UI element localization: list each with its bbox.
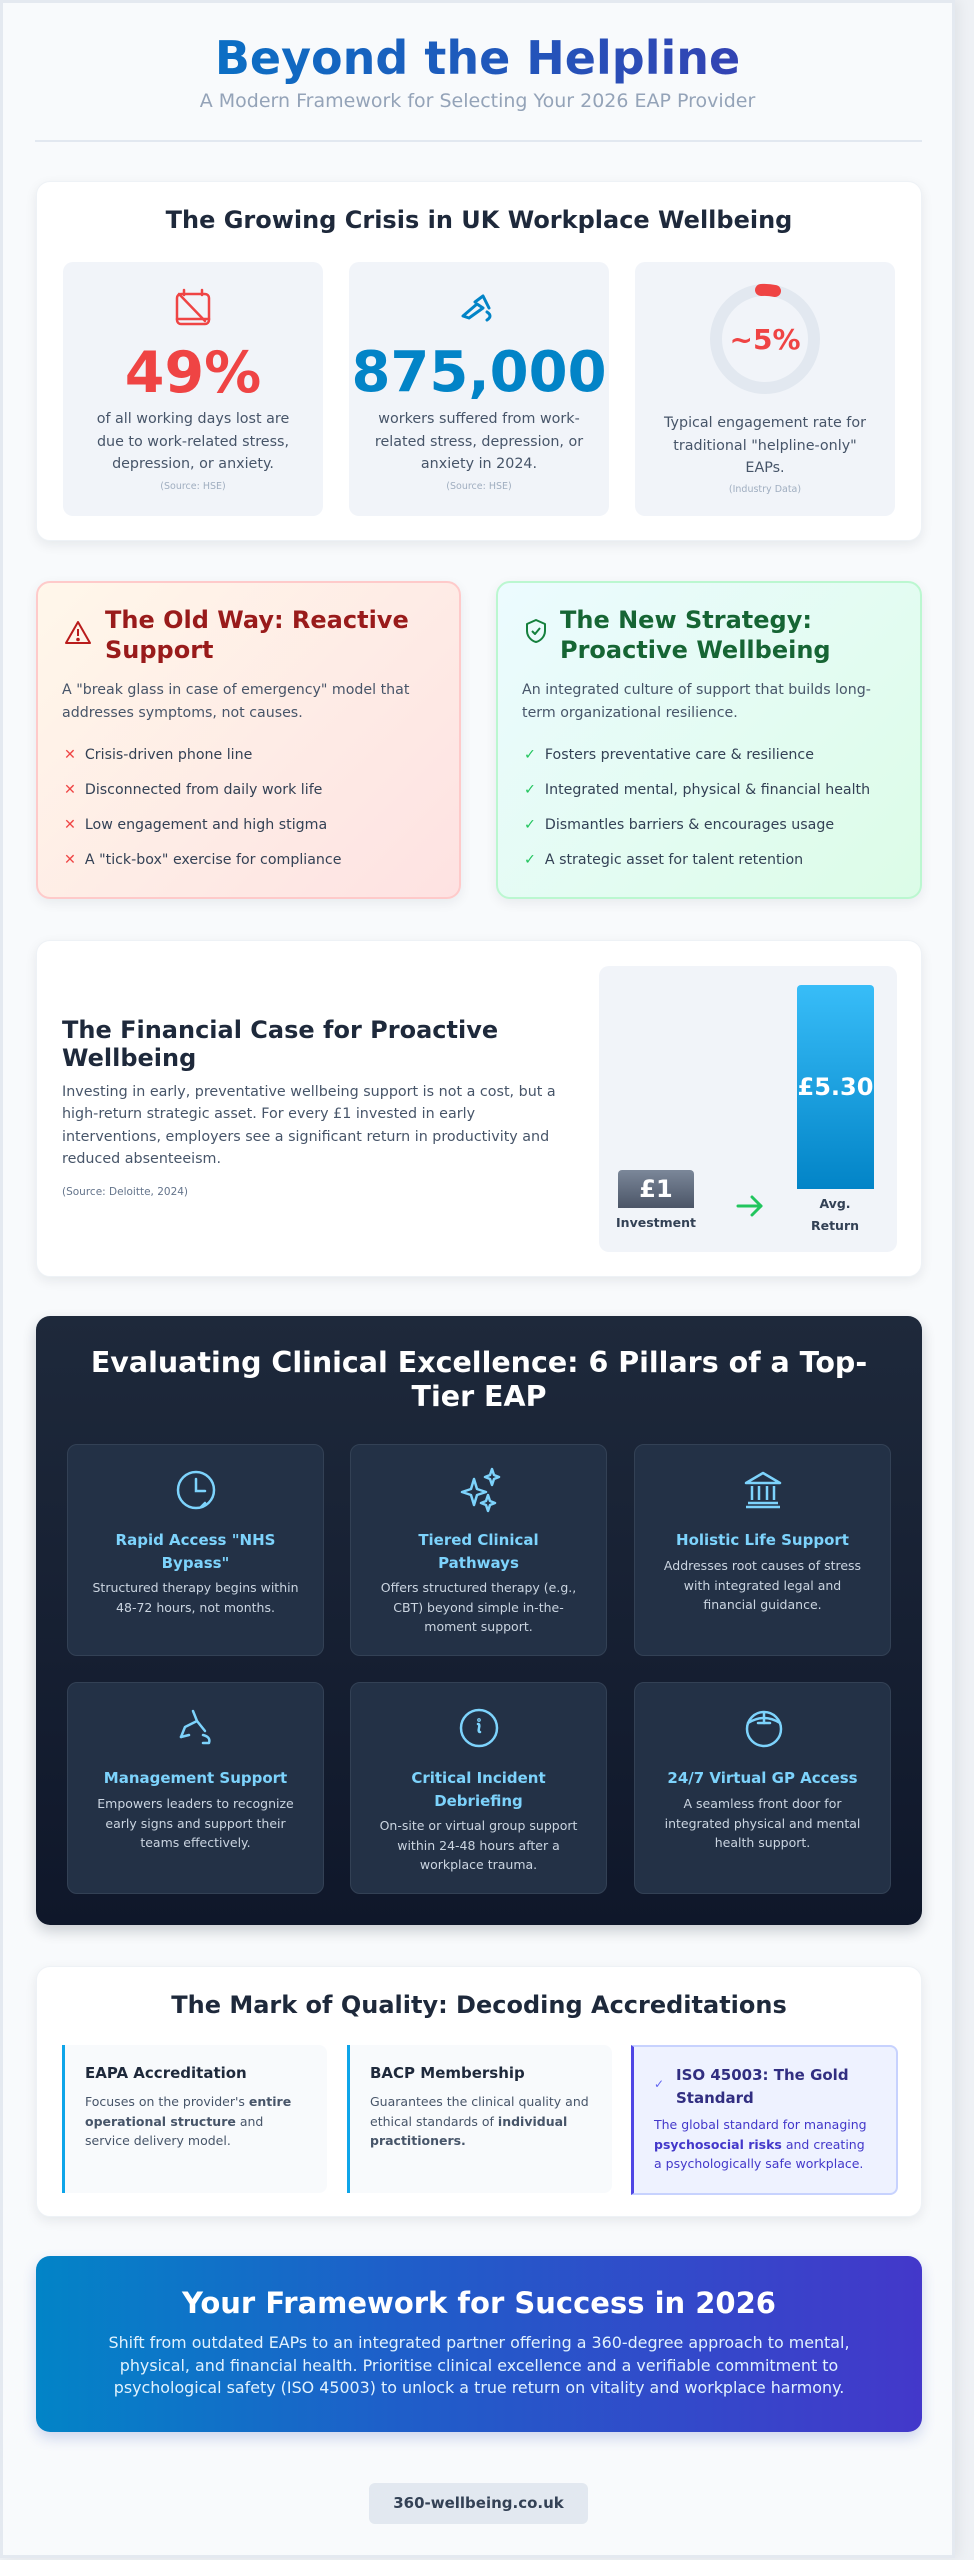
box: ISO 45003: psychosocial risks and creating — [654, 2136, 865, 2152]
panel: accreditations — [36, 1966, 922, 2217]
icon: calendar off — [176, 288, 210, 326]
pillar: tiered clinical: Tiered Clinical — [418, 1531, 539, 1549]
list: ✕ Disconnected from daily work life — [64, 782, 322, 798]
heading: Evaluating Clinical Excellence: 6 Pillars of a Top- — [91, 1346, 867, 1379]
pillar: tiered clinical: Offers structured therapy (e.g., — [381, 1580, 576, 1595]
box: ISO 45003: ✓ — [654, 2077, 664, 2091]
pillar: rapid access — [67, 1444, 324, 1656]
box: ISO 45003: Standard — [676, 2089, 754, 2107]
list: ✕ Crisis-driven phone line — [64, 747, 252, 763]
stat: 5% donut: (Industry Data) — [729, 484, 801, 495]
bar chart: Return — [811, 1218, 859, 1233]
bar: investment — [618, 1170, 694, 1208]
pillar: virtual GP: 24/7 Virtual GP Access — [667, 1769, 858, 1787]
list — [524, 747, 870, 868]
arrow — [736, 1195, 763, 1217]
pillar: virtual GP: integrated physical and mental — [665, 1816, 860, 1830]
pillar: critical incident: Debriefing — [434, 1792, 523, 1810]
panel: crisis — [36, 181, 922, 541]
bar: return: £5.30 — [798, 1073, 873, 1101]
icon: shield — [526, 619, 546, 643]
body text: Investing in early, preventative wellbeing support is not a cost, but a — [62, 1084, 556, 1100]
description — [62, 682, 410, 721]
heading — [91, 1346, 867, 1413]
body: physical, and financial health. Prioritise clinical excellence and a verifiable commitment to — [120, 2356, 838, 2374]
body text: high-return strategic asset. For every £1 invested in early — [62, 1106, 475, 1122]
description: EAPs. — [745, 460, 785, 476]
pillar: virtual GP: A seamless front door for — [684, 1796, 841, 1811]
box: ISO 45003: The global standard for managing — [654, 2117, 867, 2132]
panel: call to action — [36, 2256, 922, 2432]
heading: Wellbeing — [62, 1044, 196, 1072]
pillar: critical incident: Critical Incident — [411, 1769, 546, 1787]
icon: pen — [462, 294, 492, 322]
stat: 49% — [63, 262, 323, 516]
pillar: tiered clinical: Pathways — [438, 1554, 519, 1572]
pillar: holistic: with integrated legal and — [684, 1578, 841, 1592]
list: ✓ Integrated mental, physical & financial health — [524, 782, 870, 798]
heading: Proactive Wellbeing — [560, 636, 831, 664]
description: anxiety in 2024. — [421, 456, 537, 472]
description — [375, 411, 584, 472]
footer: website: 360-wellbeing.co.uk — [393, 2494, 564, 2512]
body text — [62, 1084, 556, 1167]
description — [664, 415, 866, 476]
body: psychological safety (ISO 45003) to unlock a true return on vitality and workplace harmony. — [114, 2378, 844, 2397]
heading: The Old Way: Reactive — [105, 606, 409, 634]
donut chart: ~5% — [730, 323, 800, 356]
box: EAPA — [62, 2045, 327, 2193]
heading: The New Strategy: — [560, 606, 812, 634]
bar chart: Avg. — [819, 1196, 851, 1211]
stat: 49%: (Source: HSE) — [160, 481, 226, 492]
description: due to work-related stress, — [97, 434, 289, 450]
description: traditional "helpline-only" — [673, 438, 857, 454]
number: 875,000 — [351, 340, 607, 405]
footer: website — [369, 2483, 588, 2524]
box: BACP: practitioners. — [370, 2133, 466, 2148]
heading: The Mark of Quality: Decoding Accreditations — [171, 1991, 787, 2019]
body text: reduced absenteeism. — [62, 1151, 221, 1167]
pillar: rapid access: Bypass" — [162, 1554, 229, 1572]
icon: warning — [65, 621, 91, 644]
pillar: management: Management Support — [104, 1769, 287, 1787]
pillar: tiered clinical: CBT) beyond simple in-the- — [393, 1600, 564, 1614]
description — [97, 411, 289, 472]
box: EAPA: service delivery model. — [85, 2133, 231, 2148]
icon: clock — [176, 1470, 216, 1510]
pillar: tiered clinical: moment support. — [424, 1619, 533, 1634]
donut chart — [710, 284, 820, 394]
box: ISO 45003 — [631, 2045, 898, 2195]
pillar: critical incident: workplace trauma. — [420, 1857, 537, 1872]
description: An integrated culture of support that builds long- — [522, 682, 871, 698]
icon: bank — [744, 1472, 782, 1508]
pillar: management: early signs and support their — [105, 1816, 286, 1830]
box: BACP — [347, 2045, 612, 2193]
list: ✓ A strategic asset for talent retention — [524, 852, 803, 868]
body — [108, 2333, 850, 2397]
body text: interventions, employers see a significant return in productivity and — [62, 1129, 549, 1145]
description: term organizational resilience. — [522, 705, 738, 721]
description: A "break glass in case of emergency" model that — [62, 682, 409, 698]
description — [522, 682, 871, 721]
description: related stress, depression, or — [375, 434, 583, 450]
pillar: virtual GP — [634, 1682, 891, 1894]
body: Shift from outdated EAPs to an integrated partner offering a 360-degree approach to mental, — [108, 2333, 850, 2352]
description: Typical engagement rate for — [664, 415, 866, 431]
panel: 6 pillars — [36, 1316, 922, 1925]
heading — [560, 606, 831, 664]
panel: new strategy — [496, 581, 922, 899]
description: of all working days lost are — [97, 411, 289, 427]
pillar: critical incident: within 24-48 hours after a — [397, 1838, 560, 1852]
description: depression, or anxiety. — [112, 456, 274, 472]
pillar: tiered clinical — [350, 1444, 607, 1656]
description: workers suffered from work- — [378, 411, 580, 427]
pillar: holistic: financial guidance. — [703, 1597, 822, 1612]
pillar: management — [67, 1682, 324, 1894]
title: Beyond the Helpline — [215, 31, 740, 85]
pillar: virtual GP: health support. — [715, 1835, 810, 1850]
box: EAPA: Focuses on the provider's entire — [85, 2094, 291, 2109]
heading: crisis: The Growing Crisis in UK Workplace Wellbeing — [166, 206, 792, 234]
number: 49% — [125, 340, 261, 406]
source: (Source: Deloitte, 2024) — [62, 1186, 188, 1198]
icon: info circle — [460, 1708, 498, 1748]
stat: 5% donut — [635, 262, 895, 516]
subtitle: A Modern Framework for Selecting Your 2026 EAP Provider — [200, 90, 755, 112]
bar: return — [797, 985, 874, 1189]
bar: investment: £1 — [639, 1175, 673, 1203]
list: ✕ Low engagement and high stigma — [64, 817, 327, 833]
stat: 875,000 — [349, 262, 609, 516]
box: BACP: Guarantees the clinical quality and — [370, 2094, 589, 2109]
heading — [62, 1016, 498, 1072]
box: EAPA: operational structure and — [85, 2114, 263, 2128]
list: ✓ Fosters preventative care & resilience — [524, 747, 814, 763]
pillar: holistic: Holistic Life Support — [676, 1531, 849, 1549]
box: ISO 45003: ISO 45003: The Gold — [676, 2066, 849, 2084]
icon: hand — [180, 1710, 211, 1744]
stat: 875,000: (Source: HSE) — [446, 481, 512, 492]
pillar: rapid access: Rapid Access "NHS — [116, 1531, 275, 1549]
heading: Tier EAP — [412, 1380, 546, 1413]
pillar: critical incident: On-site or virtual group support — [380, 1818, 577, 1833]
box: ISO 45003: a psychologically safe workplace. — [654, 2156, 863, 2171]
pillar: holistic — [634, 1444, 891, 1656]
pillar: critical incident — [350, 1682, 607, 1894]
bar chart: Investment — [616, 1215, 696, 1230]
box: EAPA: EAPA Accreditation — [85, 2064, 247, 2082]
panel: old way — [36, 581, 461, 899]
heading: Your Framework for Success in 2026 — [182, 2286, 776, 2320]
list: ✓ Dismantles barriers & encourages usage — [524, 817, 834, 833]
description: addresses symptoms, not causes. — [62, 705, 303, 721]
list: ✕ A "tick-box" exercise for compliance — [64, 852, 341, 868]
icon: stethoscope head — [746, 1710, 782, 1748]
heading: Support — [105, 636, 214, 664]
bar chart — [599, 966, 897, 1252]
box: BACP: ethical standards of individual — [370, 2114, 567, 2128]
box: BACP: BACP Membership — [370, 2064, 525, 2082]
pillar: management: Empowers leaders to recognize — [97, 1796, 294, 1811]
heading: The Financial Case for Proactive — [62, 1016, 498, 1044]
pillar: rapid access: 48-72 hours, not months. — [116, 1600, 275, 1614]
panel: financial case — [36, 940, 922, 1277]
icon: sparkles — [460, 1468, 500, 1512]
list — [64, 747, 341, 868]
pillar: rapid access: Structured therapy begins within — [92, 1580, 299, 1595]
pillar: management: teams effectively. — [140, 1835, 251, 1850]
heading — [105, 606, 409, 664]
pillar: holistic: Addresses root causes of stress — [664, 1558, 861, 1573]
